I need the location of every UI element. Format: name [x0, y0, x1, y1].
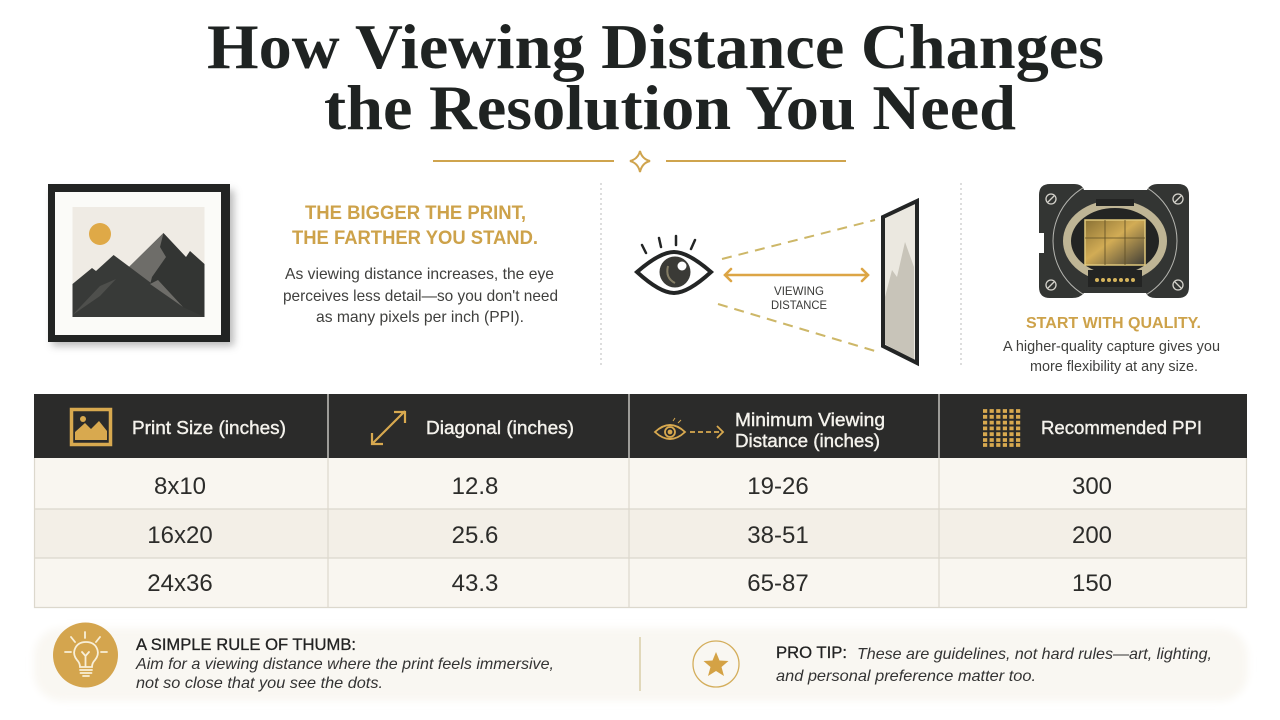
icon: light bulb — [53, 622, 118, 688]
diagram: viewing distance — [637, 201, 917, 363]
footer band — [34, 622, 1248, 701]
icon: diagonal arrow — [372, 411, 405, 444]
row: 8x10 — [154, 473, 1112, 500]
header: minimum viewing distance — [735, 410, 885, 451]
icon: framed mountain print — [48, 184, 234, 346]
label: viewing distance — [771, 284, 827, 312]
heading: start with quality: START WITH QUALITY. — [1026, 315, 1201, 332]
rule of thumb text: Aim for a viewing distance where the print feels immersive, — [135, 656, 554, 673]
table rows — [34, 458, 1247, 608]
print seen from the side — [883, 201, 917, 363]
body: bigger print: perceives less detail—so you don't need — [283, 288, 558, 305]
header: minimum viewing distance: Minimum Viewing — [735, 410, 885, 430]
rule of thumb text — [135, 635, 554, 692]
row: 24x36: 65-87 — [747, 570, 809, 597]
row: 16x20: 16x20 — [147, 522, 213, 549]
pro tip text — [776, 643, 1212, 685]
title ornament — [433, 151, 846, 172]
body: bigger print — [283, 266, 558, 326]
pro tip text: These are guidelines, not hard rules—art, lighting, — [857, 646, 1212, 663]
table header — [34, 394, 1247, 458]
row: 16x20 — [147, 522, 1112, 549]
pro tip text: PRO TIP: — [776, 643, 847, 662]
row: 16x20: 200 — [1072, 522, 1112, 549]
arrow: viewing distance — [725, 269, 868, 281]
body: bigger print: as many pixels per inch (PPI). — [316, 309, 524, 326]
icon: eye — [637, 236, 711, 293]
title: the Resolution You Need — [324, 72, 1016, 143]
rule of thumb text: not so close that you see the dots. — [136, 675, 383, 692]
body: start with quality: A higher-quality capture gives you — [1003, 338, 1220, 355]
header: print size: Print Size (inches) — [132, 418, 286, 438]
row: 24x36: 24x36 — [147, 570, 213, 597]
row: 16x20: 38-51 — [747, 522, 809, 549]
row: 24x36 — [147, 570, 1112, 597]
text block: bigger print — [283, 202, 558, 326]
rule of thumb text: A SIMPLE RULE OF THUMB: — [136, 635, 356, 654]
row: 8x10: 19-26 — [747, 473, 809, 500]
header: diagonal: Diagonal (inches) — [426, 418, 574, 438]
title — [207, 11, 1104, 143]
body: start with quality — [1003, 338, 1220, 375]
header: recommended ppi: Recommended PPI — [1041, 418, 1202, 438]
pro tip text: and personal preference matter too. — [776, 668, 1036, 685]
icon: eye with dashed arrow — [655, 418, 723, 439]
icon: dot grid — [983, 411, 1022, 445]
row: 8x10: 300 — [1072, 473, 1112, 500]
row: 8x10: 12.8 — [452, 473, 498, 500]
heading: bigger print: THE FARTHER YOU STAND. — [292, 227, 538, 249]
icon: star badge — [693, 641, 739, 687]
body: bigger print: As viewing distance increases, the eye — [285, 266, 554, 283]
row: 16x20: 25.6 — [452, 522, 498, 549]
title: How Viewing Distance Changes — [207, 11, 1104, 82]
sight lines — [718, 220, 875, 351]
heading: bigger print: THE BIGGER THE PRINT, — [305, 202, 526, 224]
icon: picture — [72, 410, 110, 444]
row: 24x36: 150 — [1072, 570, 1112, 597]
label: viewing distance: VIEWING — [774, 284, 824, 298]
header: minimum viewing distance: Distance (inches) — [735, 431, 880, 451]
label: viewing distance: DISTANCE — [771, 298, 827, 312]
row: 8x10: 8x10 — [154, 473, 206, 500]
body: start with quality: more flexibility at any size. — [1030, 358, 1198, 375]
row: 24x36: 43.3 — [452, 570, 498, 597]
icon: camera sensor — [1039, 179, 1189, 303]
table — [34, 394, 1247, 608]
heading: bigger print — [292, 202, 538, 249]
text block: start with quality — [1003, 315, 1220, 375]
